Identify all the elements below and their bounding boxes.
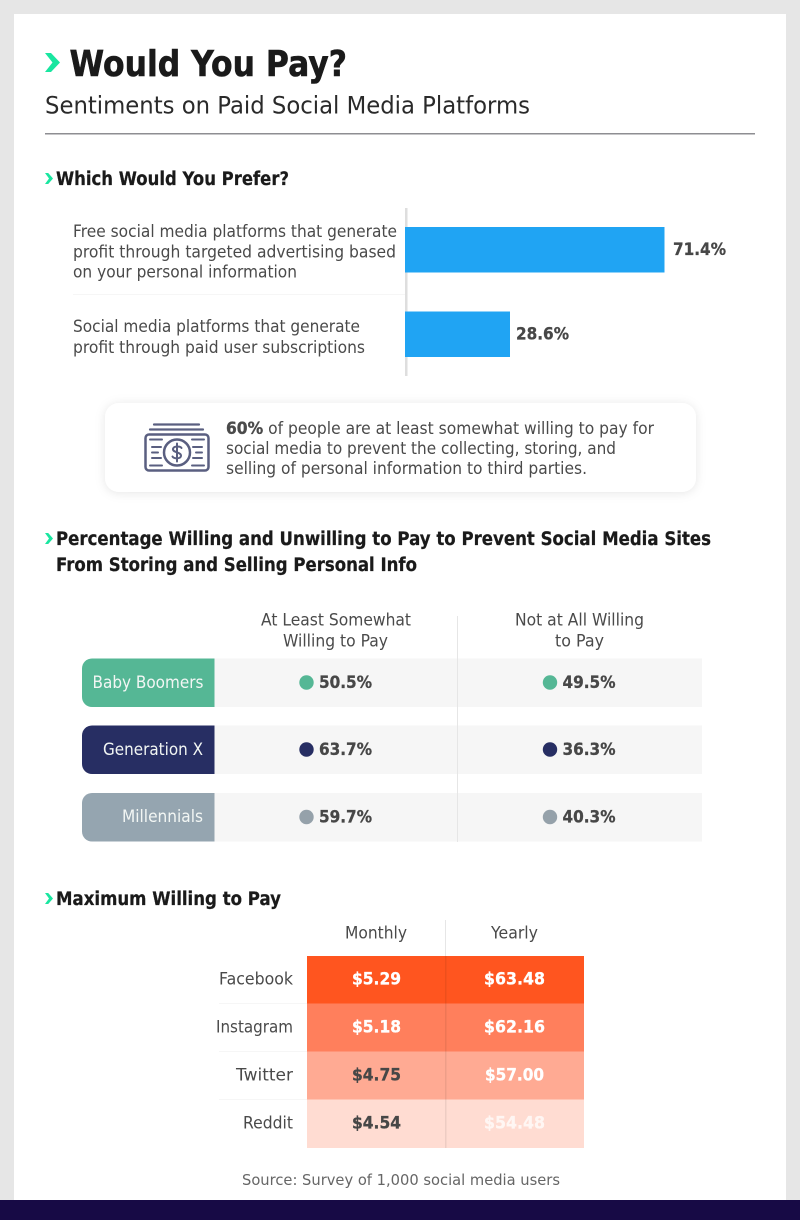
label: free platforms: on your personal information <box>73 262 297 282</box>
row: twitter: $4.75 <box>352 1066 401 1086</box>
heading: percentage willing: Percentage Willing and Unwilling to Pay to Prevent Social Media Sites <box>56 529 711 550</box>
row: facebook: $5.29 <box>352 970 401 990</box>
bar: free 71.4% <box>405 227 726 272</box>
row: millennials: Millennials <box>122 807 203 826</box>
row: baby boomers: Baby Boomers <box>92 673 204 692</box>
row: generation x: Generation X <box>103 740 203 759</box>
row: twitter: $57.00 <box>485 1066 544 1086</box>
callout <box>105 403 696 492</box>
callout text: selling of personal information to third parties. <box>226 459 587 478</box>
column header: willing: Willing to Pay <box>283 632 388 650</box>
row: twitter <box>235 1052 584 1100</box>
column header: not willing: Not at All Willing <box>515 610 644 630</box>
callout text <box>226 419 654 478</box>
label: free platforms: Free social media platforms that generate <box>73 222 397 241</box>
heat table <box>216 956 584 1148</box>
row: instagram: $5.18 <box>352 1018 401 1038</box>
bar: free 71.4%: 71.4% <box>673 240 726 260</box>
label: free platforms: profit through targeted advertising based <box>73 242 396 262</box>
label: paid platforms: profit through paid user subscriptions <box>73 338 365 357</box>
row: reddit <box>243 1100 584 1148</box>
bar: paid 28.6%: 28.6% <box>516 324 569 344</box>
row: baby boomers <box>82 658 702 707</box>
column headers: Yearly <box>490 924 538 942</box>
heading: maximum willing to pay: Maximum Willing to Pay <box>56 889 281 910</box>
label: free platforms <box>73 222 397 282</box>
icon: title chevron <box>45 53 60 72</box>
callout text: 60% of people are at least somewhat willing to pay for <box>226 419 654 438</box>
section: maximum willing to pay <box>45 889 584 1148</box>
row: generation x: 63.7% <box>319 740 372 760</box>
column headers <box>345 924 538 942</box>
subtitle: Sentiments on Paid Social Media Platforms <box>45 92 530 120</box>
heading: percentage willing <box>45 529 711 576</box>
row: generation x: 36.3% <box>562 740 616 760</box>
row: baby boomers: 50.5% <box>319 673 372 693</box>
row: reddit: Reddit <box>243 1114 293 1132</box>
title block <box>45 44 530 120</box>
row: reddit: $4.54 <box>352 1114 401 1134</box>
column header: not willing: to Pay <box>555 632 604 650</box>
section: willingness table <box>45 529 711 842</box>
label: paid platforms <box>73 317 365 357</box>
column header: willing <box>261 610 411 650</box>
heading: percentage willing: From Storing and Selling Personal Info <box>56 555 417 576</box>
column header: not willing <box>515 610 644 650</box>
row: reddit: $54.48 <box>484 1114 545 1134</box>
bar: paid 28.6% <box>405 312 569 357</box>
row: instagram: $62.16 <box>484 1018 545 1038</box>
row: millennials <box>82 793 702 842</box>
row: instagram: Instagram <box>216 1018 293 1036</box>
label: paid platforms: Social media platforms that generate <box>73 317 360 336</box>
section: preference chart <box>45 169 726 376</box>
heading: which would you prefer: Which Would You Prefer? <box>56 169 289 190</box>
row: facebook <box>219 956 584 1004</box>
row: millennials: 40.3% <box>562 808 616 828</box>
source: Source: Survey of 1,000 social media users <box>242 1171 560 1189</box>
row: facebook: $63.48 <box>484 970 545 990</box>
icon: money stack <box>146 424 208 470</box>
footer bar <box>0 1200 800 1220</box>
row: facebook: Facebook <box>219 970 293 988</box>
row: instagram <box>216 1004 584 1052</box>
column headers: Monthly <box>345 924 407 942</box>
callout text: social media to prevent the collecting, storing, and <box>226 439 616 458</box>
column header: willing: At Least Somewhat <box>261 610 411 630</box>
row: millennials: 59.7% <box>319 808 372 828</box>
title: Would You Pay? <box>70 44 347 85</box>
row: twitter: Twitter <box>235 1066 293 1084</box>
row: baby boomers: 49.5% <box>562 673 616 693</box>
row: generation x <box>82 726 702 774</box>
